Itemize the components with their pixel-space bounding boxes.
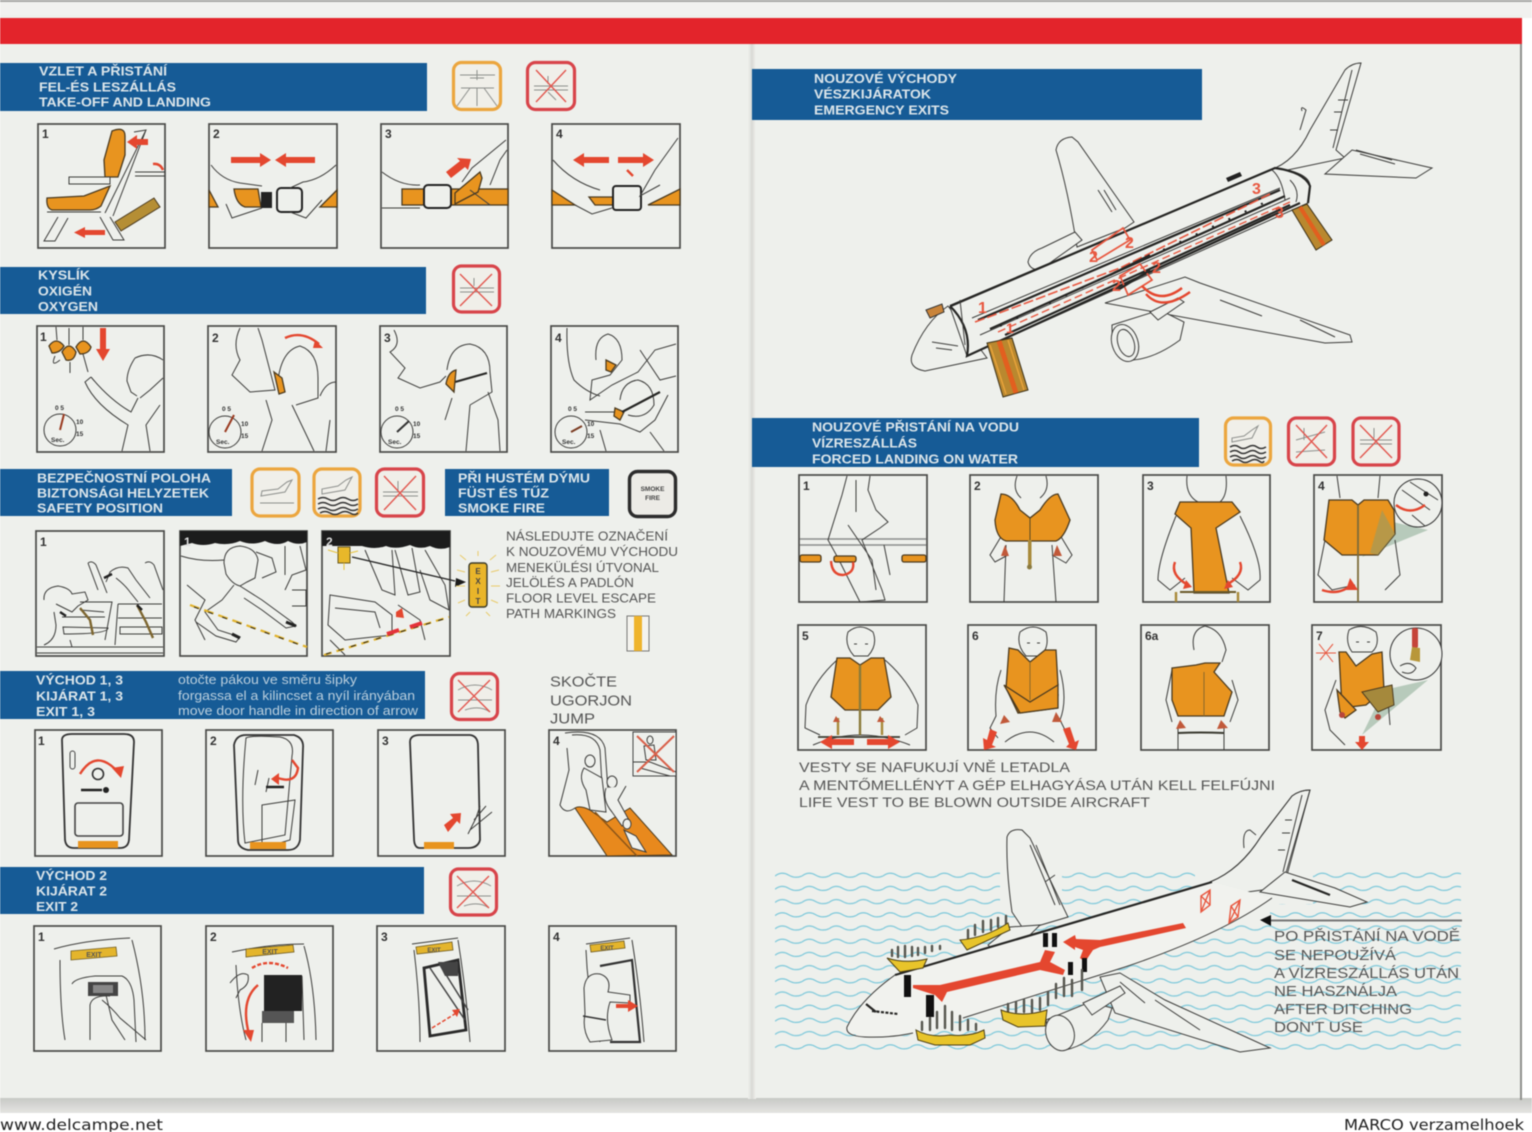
icon: arrow to exit sign: T [476, 597, 481, 606]
panel: oxygen mask pull: 10 [76, 419, 84, 426]
panel: window exit lift [206, 926, 333, 1051]
text: floor escape path: MENEKÜLÉSI ÚTVONAL [506, 560, 659, 575]
heading: exit 1, 3: KIJÁRAT 1, 3 [36, 688, 123, 704]
raft front near [916, 1006, 985, 1045]
chart: aircraft cutaway exit map: 2 [1112, 278, 1121, 295]
panel: oxygen mask strap: Sec. [388, 439, 402, 446]
icon: arrow to exit sign [455, 551, 500, 616]
icon: smoke fire sign: FIRE [645, 495, 661, 502]
heading: forced landing on water: VÍZRESZÁLLÁS [812, 436, 917, 450]
panel: oxygen mask pull: 15 [76, 431, 84, 438]
icon: arrow to exit sign: I [477, 587, 479, 596]
panel: help others with mask: 10 [587, 421, 595, 428]
icon: water landing [1226, 418, 1270, 465]
heading: smoke fire [445, 469, 609, 516]
panel: exit door open [206, 730, 333, 856]
tail fin [1210, 790, 1310, 895]
panel: window exit remove cover: 1 [38, 930, 45, 944]
panel: vest over head: 2 [974, 479, 981, 493]
chart: ditching illustration [775, 790, 1462, 1056]
heading: exit 1, 3: otočte pákou ve směru šipky [178, 673, 358, 687]
heading: exit 1, 3: forgassa el a kilincset a nyíl irányában [178, 689, 415, 703]
panel: window exit climb out: 4 [553, 930, 560, 944]
aisle lines [978, 190, 1290, 335]
icon: no smoking [528, 62, 574, 110]
panel: help others with mask: 15 [587, 433, 595, 440]
heading: exit 2: EXIT 2 [36, 899, 78, 914]
panel: help others with mask: Sec. [562, 439, 576, 446]
panel: help others with mask [551, 326, 678, 452]
panel: fasten belt [209, 124, 337, 248]
red top band [0, 18, 1522, 44]
heading: emergency exits: NOUZOVÉ VÝCHODY [814, 71, 957, 86]
panel: vest inflate tabs: 6 [972, 629, 979, 643]
tail fin [1270, 63, 1361, 172]
panel: window exit remove hatch [377, 926, 505, 1051]
mid exits [1092, 228, 1152, 295]
text: after ditching: SE NEPOUŽÍVÁ [1274, 947, 1396, 964]
text: life vest warning: VESTY SE NAFUKUJÍ VNĚ LETADLA [799, 759, 1071, 775]
panel: oxygen mask pull [37, 326, 164, 452]
heading: safety position: BIZTONSÁGI HELYZETEK [37, 486, 210, 500]
panel: window exit climb out: EXIT [600, 946, 614, 952]
text: jump: SKOČTE [550, 674, 617, 690]
front slide [987, 338, 1028, 397]
heading: take-off and landing [0, 63, 427, 111]
chart: aircraft cutaway exit map: 2 [1152, 260, 1161, 277]
raft front far [887, 946, 940, 972]
panel: window exit remove hatch: EXIT [427, 948, 441, 954]
panel: oxygen mask fit: 0 5 [222, 406, 231, 413]
icon: no smoking safety [376, 469, 424, 516]
chart: aircraft cutaway exit map [911, 63, 1432, 397]
text: after ditching: A VÍZRESZÁLLÁS UTÁN [1274, 965, 1459, 982]
icon: fasten seatbelt sign [454, 62, 500, 110]
text: floor escape path: FLOOR LEVEL ESCAPE [506, 590, 656, 606]
icon: smoke fire sign [630, 472, 676, 516]
heading: exit 2: VÝCHOD 2 [36, 868, 107, 883]
text: floor escape path: PATH MARKINGS [506, 606, 616, 621]
panel: exit door pull bar [378, 730, 505, 856]
panel: jump on slide [549, 730, 676, 856]
text: floor escape path: JELÖLÉS A PADLÓN [506, 575, 634, 590]
heading: oxygen [0, 267, 426, 314]
panel: tighten belt: 3 [385, 127, 392, 141]
far engine [1028, 232, 1082, 270]
rear slide [1292, 204, 1332, 250]
heading: smoke fire: PŘI HUSTÉM DÝMU [458, 470, 590, 486]
heading: exit 1, 3: VÝCHOD 1, 3 [36, 672, 123, 688]
panel: tighten belt [381, 124, 508, 248]
near engine [1112, 310, 1184, 360]
icon: no smoking exit 1, 3 [452, 674, 498, 720]
heading: exit 1, 3: EXIT 1, 3 [36, 704, 95, 719]
text: after ditching: DON'T USE [1274, 1019, 1363, 1036]
panel: vest tighten: 5 [802, 629, 809, 643]
panel: vest light and whistle: 7 [1316, 629, 1323, 643]
text: jump: UGORJON [550, 692, 632, 710]
raft wing near [1001, 970, 1082, 1027]
icon: water impact [314, 469, 360, 516]
panel: exit door turn handle: 1 [38, 734, 45, 748]
panel: help others with mask: 0 5 [568, 406, 577, 413]
text: floor escape path [506, 528, 678, 621]
heading: forced landing on water: FORCED LANDING ON WATER [812, 452, 1019, 466]
icon: no smoking water [1353, 418, 1399, 465]
panel: seat upright [38, 124, 165, 248]
heading: take-off and landing: VZLET A PŘISTÁNÍ [39, 64, 167, 78]
red escape arrows [1063, 923, 1186, 962]
chart: aircraft cutaway exit map: 2 [1125, 235, 1134, 252]
panel: oxygen mask pull: 0 5 [55, 405, 64, 412]
heading: take-off and landing: FEL-ÉS LESZÁLLÁS [39, 80, 176, 94]
panel: oxygen mask fit: 10 [241, 421, 249, 428]
panel: vest inflate tabs [968, 625, 1096, 750]
heading: emergency exits: EMERGENCY EXITS [814, 102, 949, 118]
heading: exit 2: KIJÁRAT 2 [36, 884, 107, 898]
panel: vest over head [970, 475, 1098, 602]
panel: window exit remove cover [34, 926, 161, 1051]
panel: fasten belt: 2 [213, 127, 220, 141]
text: life vest warning: LIFE VEST TO BE BLOWN OUTSIDE AIRCRAFT [799, 794, 1151, 810]
panel: oxygen mask fit: Sec. [216, 439, 230, 446]
panel: vest under seat: 1 [803, 479, 810, 493]
icon: smoke fire sign: SMOKE [641, 486, 665, 493]
chart: aircraft cutaway exit map: 3 [1252, 181, 1261, 198]
panel: follow floor path: 2 [326, 535, 333, 549]
text: after ditching [1274, 928, 1460, 1036]
panel: window exit remove cover: EXIT [86, 952, 103, 959]
heading: take-off and landing: TAKE-OFF AND LANDING [39, 94, 211, 110]
panel: vest straps back: 3 [1147, 479, 1154, 493]
heading: exit 1, 3: move door handle in direction of arrow [178, 704, 419, 718]
icon: arrow to exit sign: X [475, 577, 481, 586]
panel: vest inflate mouth: 6a [1145, 629, 1159, 643]
nose [911, 306, 987, 371]
panel: oxygen mask fit: 2 [212, 331, 219, 345]
panel: release belt [552, 124, 680, 248]
heading: exit 1, 3 [0, 671, 425, 719]
text: after ditching: PO PŘISTÁNÍ NA VODĚ [1274, 928, 1460, 945]
heading: smoke fire: SMOKE FIRE [458, 500, 545, 516]
panel: oxygen mask fit [208, 326, 336, 452]
panel: jump on slide: 4 [553, 734, 560, 748]
panel: vest straps back [1143, 475, 1270, 602]
icon: no smoking exit 2 [450, 869, 496, 915]
panel: help others with mask: 4 [555, 331, 562, 345]
near wing [1105, 277, 1352, 343]
icon: arrow to exit sign: E [475, 567, 481, 576]
panel: seat upright: 1 [42, 127, 49, 141]
icon: floor path marking [627, 616, 649, 651]
fuselage [846, 882, 1272, 1038]
cabin shell [950, 168, 1310, 356]
panel: window exit lift: 2 [210, 930, 217, 944]
near wing [1100, 973, 1270, 1052]
text: life vest warning [799, 759, 1275, 810]
heading: safety position: BEZPEČNOSTNÍ POLOHA [37, 470, 212, 486]
panel: oxygen mask fit: 15 [241, 433, 249, 440]
panel: vest inflate mouth [1141, 625, 1269, 750]
heading: forced landing on water [752, 418, 1199, 467]
chart: aircraft cutaway exit map: 3 [1275, 205, 1284, 222]
far engine [988, 925, 1040, 952]
heading: oxygen: OXYGEN [38, 299, 98, 314]
heading: emergency exits [752, 69, 1202, 120]
panel: vest tighten [798, 625, 926, 750]
panel: exit door open: 2 [210, 734, 217, 748]
panel: oxygen mask strap: 0 5 [395, 406, 404, 413]
text: life vest warning: A MENTŐMELLÉNYT A GÉP ELHAGYÁSA UTÁN KELL FELFÚJNI [799, 777, 1275, 793]
chart: aircraft cutaway exit map: 2 [1089, 249, 1098, 266]
text: floor escape path: K NOUZOVÉMU VÝCHODU [506, 544, 678, 559]
panel: release belt: 4 [556, 127, 563, 141]
panel: vest fasten: 4 [1318, 479, 1325, 493]
heading: forced landing on water: NOUZOVÉ PŘISTÁNÍ NA VODU [812, 420, 1019, 434]
far wing [1007, 830, 1068, 930]
panel: oxygen mask strap: 3 [384, 331, 391, 345]
raft wing far [960, 916, 1010, 950]
chart: aircraft cutaway exit map: 1 [1006, 320, 1014, 336]
panel: follow floor path [322, 531, 455, 656]
arrow to warning [1260, 915, 1462, 926]
heading: exit 2 [0, 867, 424, 914]
text: floor escape path: NÁSLEDUJTE OZNAČENÍ [506, 528, 668, 544]
text: after ditching: AFTER DITCHING [1274, 1001, 1412, 1018]
panel: oxygen mask strap: 15 [413, 433, 421, 440]
icon: land impact [252, 469, 299, 516]
panel: exit door pull bar: 3 [382, 734, 389, 748]
panel: vest fasten [1314, 475, 1442, 602]
panel: crawl under smoke: 1 [184, 535, 191, 549]
exit chutes [904, 933, 1087, 1017]
text: after ditching: NE HASZNÁLJA [1274, 983, 1397, 1000]
panel: crawl under smoke [180, 531, 307, 656]
no exit marks at rear [1201, 890, 1240, 923]
text: jump: JUMP [550, 710, 595, 728]
panel: vest under seat [799, 475, 927, 602]
door numbers: 1 [978, 300, 987, 317]
tail plane [1325, 150, 1432, 178]
heading: oxygen: KYSLÍK [38, 268, 91, 282]
heading: oxygen: OXIGÉN [38, 284, 92, 298]
heading: emergency exits: VÉSZKIJÁRATOK [814, 86, 932, 102]
panel: vest light and whistle [1312, 625, 1442, 750]
panel: oxygen mask strap: 10 [413, 421, 421, 428]
panel: exit door turn handle [35, 730, 162, 856]
panel: oxygen mask pull: Sec. [51, 437, 65, 444]
heading: safety position: SAFETY POSITION [37, 500, 163, 516]
sea waves [775, 868, 1461, 1056]
icon: no smoking water door [1288, 418, 1334, 465]
panel: oxygen mask pull: 1 [40, 330, 47, 344]
panel: window exit remove hatch: 3 [381, 930, 388, 944]
panel: brace position: 1 [40, 535, 47, 549]
heading: smoke fire: FÜST ÉS TŰZ [458, 486, 549, 500]
near engine [1046, 1002, 1112, 1050]
text: jump [550, 674, 632, 728]
icon: no smoking oxygen [454, 266, 500, 312]
heading: safety position [0, 469, 232, 516]
panel: brace position [36, 531, 164, 656]
panel: window exit climb out [549, 926, 676, 1051]
door flaps [926, 304, 944, 318]
panel: oxygen mask strap [380, 326, 507, 452]
far wing [1056, 137, 1134, 247]
tail plane [1260, 872, 1367, 907]
panel: window exit lift: EXIT [262, 949, 279, 956]
